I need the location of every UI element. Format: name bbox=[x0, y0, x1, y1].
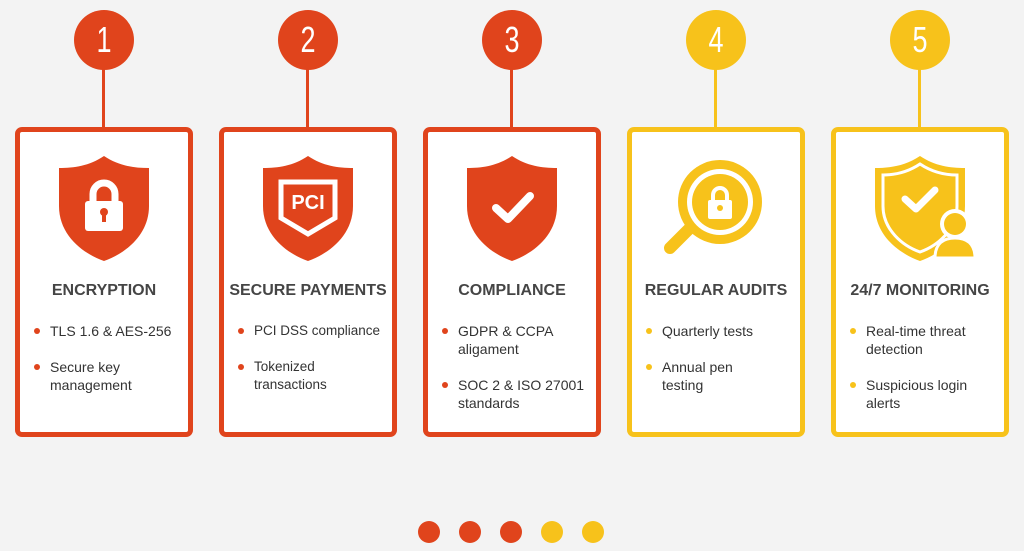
step 5 number: 5 bbox=[912, 19, 928, 60]
panel: compliance: COMPLIANCE bbox=[458, 282, 566, 299]
panel: 24/7 monitoring bbox=[831, 127, 1009, 437]
step 3 number bbox=[482, 10, 542, 70]
panel: 24/7 monitoring: 24/7 MONITORING bbox=[850, 282, 990, 299]
panel: regular audits bbox=[627, 127, 805, 437]
panel: regular audits: testing bbox=[662, 377, 703, 393]
step 2 number bbox=[278, 10, 338, 70]
step 4 number bbox=[686, 10, 746, 70]
step 1 number bbox=[74, 10, 134, 70]
panel: compliance: SOC 2 & ISO 27001 bbox=[458, 377, 584, 393]
panel: secure payments bbox=[219, 127, 397, 437]
icon: check shield bbox=[467, 156, 557, 261]
panel: 24/7 monitoring: Real-time threat bbox=[866, 323, 966, 339]
icon: shield user bbox=[875, 156, 974, 261]
panel: secure payments: SECURE PAYMENTS bbox=[229, 282, 387, 299]
panel: regular audits: Quarterly tests bbox=[662, 323, 753, 339]
panel: secure payments: Tokenized bbox=[254, 359, 315, 374]
panel: compliance: aligament bbox=[458, 341, 519, 357]
panel: 24/7 monitoring: Suspicious login bbox=[866, 377, 967, 393]
panel: secure payments: PCI DSS compliance bbox=[254, 323, 380, 338]
panel: compliance: GDPR & CCPA bbox=[458, 323, 553, 339]
icon: PCI shield bbox=[263, 156, 353, 261]
icon: PCI shield: PCI bbox=[291, 192, 325, 214]
panel: compliance bbox=[423, 127, 601, 437]
panel: encryption: management bbox=[50, 377, 132, 393]
panel: regular audits: REGULAR AUDITS bbox=[645, 282, 787, 299]
step 2 number: 2 bbox=[300, 19, 316, 60]
icon: magnifier lock bbox=[664, 160, 762, 254]
panel: 24/7 monitoring: detection bbox=[866, 341, 923, 357]
panel: 24/7 monitoring: alerts bbox=[866, 395, 900, 411]
panel: compliance: standards bbox=[458, 395, 519, 411]
panel: encryption: ENCRYPTION bbox=[52, 282, 156, 299]
step 1 number: 1 bbox=[96, 19, 112, 60]
step 5 number bbox=[890, 10, 950, 70]
panel: secure payments: transactions bbox=[254, 377, 327, 392]
step 4 number: 4 bbox=[708, 19, 724, 60]
panel: encryption: Secure key bbox=[50, 359, 120, 375]
icon: shield lock bbox=[59, 156, 149, 261]
panel: encryption bbox=[15, 127, 193, 437]
panel: regular audits: Annual pen bbox=[662, 359, 733, 375]
step 3 number: 3 bbox=[504, 19, 520, 60]
pagination dots bbox=[418, 521, 604, 543]
panel: encryption: TLS 1.6 & AES-256 bbox=[50, 323, 171, 339]
